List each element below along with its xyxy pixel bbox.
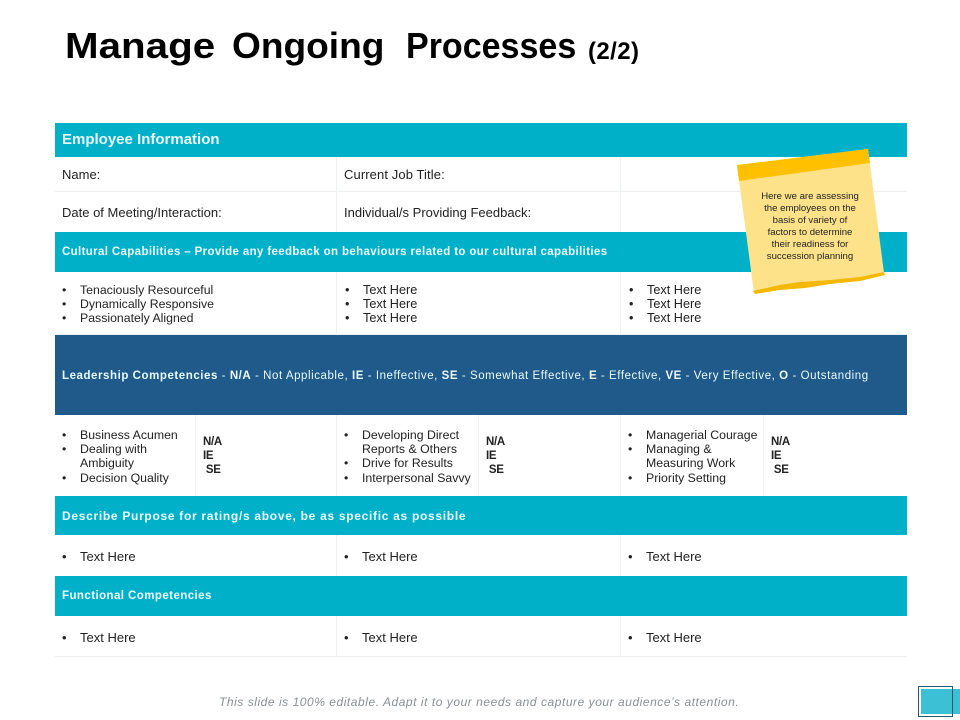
sticky note callout: factors to determine: [768, 227, 852, 238]
field: name: Name:: [62, 167, 100, 182]
cultural list 2: •: [345, 283, 349, 297]
sticky note callout: succession planning: [767, 251, 853, 262]
rating options 1: N/A: [203, 436, 222, 448]
title: Processes: [406, 25, 576, 66]
functional item 3: •: [628, 630, 633, 645]
header band: employee information: [55, 123, 907, 157]
field: current job title: Current Job Title:: [344, 167, 445, 182]
header band: leadership competencies: [55, 335, 907, 415]
header band: functional competencies: [55, 576, 907, 616]
sticky note callout: [737, 149, 885, 294]
cultural list 1: Passionately Aligned: [80, 311, 193, 325]
leadership list 1: [62, 428, 178, 485]
functional item 2: •: [344, 630, 349, 645]
title: (2/2): [588, 38, 639, 65]
leadership list 1: •: [62, 442, 66, 456]
header band: purpose for ratings: [55, 496, 907, 535]
field: feedback providers: Individual/s Providing Feedback:: [344, 205, 531, 220]
cultural list 3: •: [629, 297, 633, 311]
rating options 1: IE: [203, 450, 213, 462]
functional item 1: •: [62, 630, 67, 645]
functional item 3: Text Here: [646, 630, 702, 645]
leadership list 2: Interpersonal Savvy: [362, 471, 471, 485]
cultural list 3: Text Here: [647, 311, 701, 325]
cultural list 2: Text Here: [363, 297, 417, 311]
leadership list 3: •: [628, 442, 632, 456]
leadership list 1: Dealing with: [80, 442, 147, 456]
header band: functional competencies: Functional Competencies: [62, 590, 212, 602]
leadership list 1: •: [62, 428, 66, 442]
sticky note callout: Here we are assessing: [761, 191, 859, 202]
title: [65, 25, 639, 66]
cultural list 1: Tenaciously Resourceful: [80, 283, 213, 297]
cultural list 1: •: [62, 311, 66, 325]
cultural list 1: •: [62, 283, 66, 297]
cultural list 3: •: [629, 311, 633, 325]
title: Ongoing: [232, 25, 384, 66]
leadership list 1: Business Acumen: [80, 428, 178, 442]
title: Manage: [65, 25, 215, 66]
leadership list 2: •: [344, 456, 348, 470]
cultural list 2: [345, 283, 417, 325]
cultural list 1: •: [62, 297, 66, 311]
rating options 2: N/A: [486, 436, 505, 448]
purpose item 3: Text Here: [646, 549, 702, 564]
leadership list 1: •: [62, 471, 66, 485]
rating options 2: SE: [489, 464, 504, 476]
sticky note callout: basis of variety of: [773, 215, 847, 226]
header band: leadership competencies: Leadership Competencies - N/A - Not Applicable, IE - Ineffective, SE - Somewhat Effective, E - Effective, VE - Very Effective, O - Outstanding: [62, 370, 869, 382]
leadership list 2: •: [344, 471, 348, 485]
purpose item 1: Text Here: [80, 549, 136, 564]
header band: cultural capabilities: [55, 232, 907, 272]
leadership list 2: Drive for Results: [362, 456, 453, 470]
leadership list 3: Managing &: [646, 442, 712, 456]
leadership list 3: Measuring Work: [646, 456, 735, 470]
rating options 3: [771, 436, 790, 476]
rating options 3: N/A: [771, 436, 790, 448]
header band: purpose for ratings: Describe Purpose for rating/s above, be as specific as possible: [62, 509, 466, 523]
leadership list 2: Developing Direct: [362, 428, 459, 442]
purpose item 3: •: [628, 549, 633, 564]
rating options 3: SE: [774, 464, 789, 476]
cultural list 2: •: [345, 311, 349, 325]
leadership list 3: [628, 428, 757, 485]
cultural list 1: Dynamically Responsive: [80, 297, 214, 311]
functional item 1: Text Here: [80, 630, 136, 645]
cultural list 2: Text Here: [363, 311, 417, 325]
leadership list 3: Priority Setting: [646, 471, 726, 485]
header band: employee information: Employee Information: [62, 131, 220, 148]
rating options 2: IE: [486, 450, 496, 462]
cultural list 2: •: [345, 297, 349, 311]
leadership list 2: Reports & Others: [362, 442, 457, 456]
purpose item 2: Text Here: [362, 549, 418, 564]
rating options 2: [486, 436, 505, 476]
cultural list 2: Text Here: [363, 283, 417, 297]
leadership list 2: •: [344, 428, 348, 442]
purpose item 1: •: [62, 549, 67, 564]
footer note: This slide is 100% editable. Adapt it to your needs and capture your audience’s attention.: [219, 695, 739, 709]
leadership list 1: Ambiguity: [80, 456, 134, 470]
leadership list 1: Decision Quality: [80, 471, 169, 485]
leadership list 3: •: [628, 428, 632, 442]
rating options 1: [203, 436, 222, 476]
purpose item 2: •: [344, 549, 349, 564]
leadership list 2: [344, 428, 471, 485]
cultural list 3: •: [629, 283, 633, 297]
rating options 1: SE: [206, 464, 221, 476]
sticky note callout: the employees on the: [764, 203, 856, 214]
cultural list 3: Text Here: [647, 283, 701, 297]
rating options 3: IE: [771, 450, 781, 462]
cultural list 3: [629, 283, 701, 325]
leadership list 3: Managerial Courage: [646, 428, 757, 442]
icon: corner logo: [918, 686, 960, 717]
field: date of meeting: Date of Meeting/Interaction:: [62, 205, 222, 220]
header band: cultural capabilities: Cultural Capabilities – Provide any feedback on behaviours related to our cultural capabilities: [62, 246, 607, 258]
functional item 2: Text Here: [362, 630, 418, 645]
leadership list 3: •: [628, 471, 632, 485]
cultural list 1: [62, 283, 214, 325]
sticky note callout: their readiness for: [772, 239, 848, 250]
cultural list 3: Text Here: [647, 297, 701, 311]
